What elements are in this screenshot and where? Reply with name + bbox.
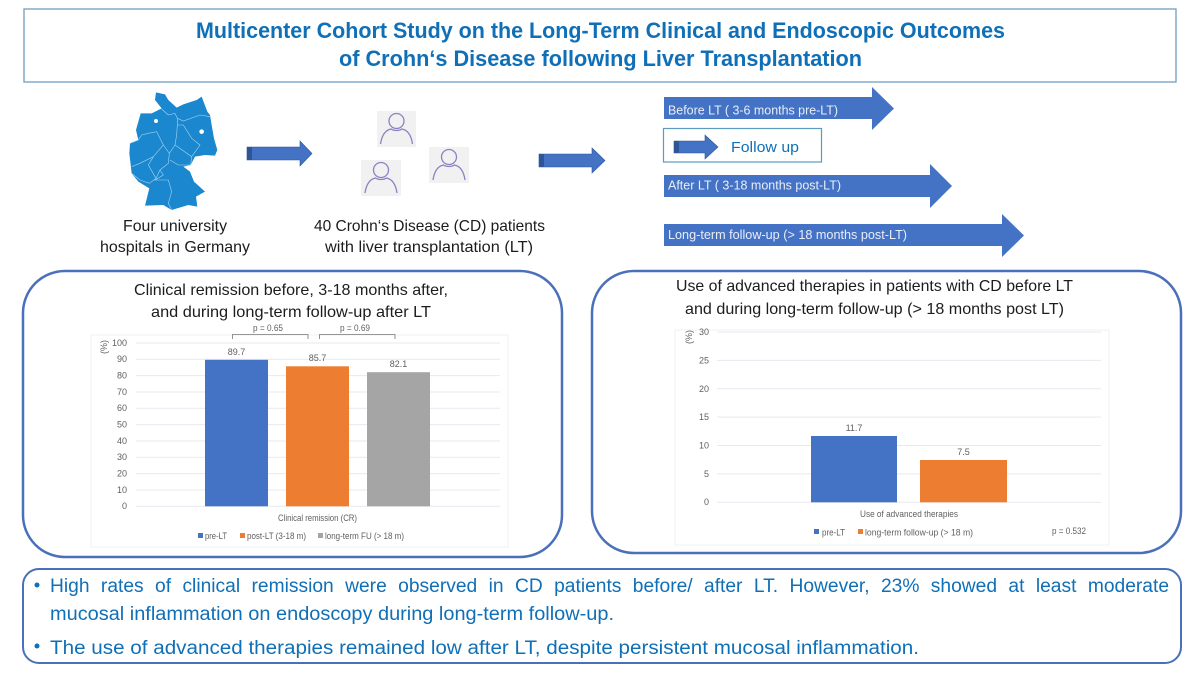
bar chart: clinical remission: 80 (117, 370, 127, 380)
bar: pre-LT (811, 436, 897, 502)
bar chart: clinical remission: (%) (99, 340, 109, 354)
conclusion 2: The use of advanced therapies remained low after LT, despite persistent mucosal inflammation. (50, 638, 919, 659)
bar chart: clinical remission: 10 (117, 485, 127, 495)
bar: post-LT (286, 366, 349, 506)
bar chart: clinical remission: 90 (117, 354, 127, 364)
p-value brackets: p = 0.65 (253, 323, 283, 333)
p-value: p = 0.532 (1052, 526, 1086, 536)
text: four university hospitals: hospitals in Germany (100, 239, 250, 256)
bar chart: clinical remission: 82.1 (390, 359, 407, 369)
p-value brackets: p = 0.69 (340, 323, 370, 333)
bar: pre-LT (205, 360, 268, 506)
chart legend: post-LT (3-18 m) (247, 531, 306, 541)
icon: patient 3 (429, 147, 469, 183)
title box (24, 9, 1176, 82)
arrow: map to patients (247, 141, 312, 166)
bar chart: clinical remission: 0 (122, 501, 127, 511)
text: patients description (314, 218, 545, 256)
bar chart: advanced therapies: 7.5 (957, 447, 970, 457)
arrow: after LT: After LT ( 3-18 months post-LT) (668, 178, 841, 192)
bar chart: advanced therapies: 25 (699, 356, 709, 366)
panel: clinical remission (23, 271, 562, 557)
legend: follow up: Follow up (731, 139, 799, 156)
title box: Multicenter Cohort Study on the Long-Term Clinical and Endoscopic Outcomes (196, 18, 1005, 43)
bar chart: clinical remission: 100 (112, 338, 127, 348)
bar chart: clinical remission: 70 (117, 387, 127, 397)
conclusion 1 (34, 576, 1169, 625)
heading: advanced therapies (676, 278, 1073, 318)
bar chart: advanced therapies: 11.7 (846, 423, 862, 433)
bar chart: clinical remission: 30 (117, 452, 127, 462)
chart legend: pre-LT (205, 531, 227, 541)
bar chart: advanced therapies: 15 (699, 412, 709, 422)
bar chart: clinical remission (91, 323, 508, 547)
conclusion 1: mucosal inflammation on endoscopy during long-term follow-up. (50, 604, 614, 625)
arrow: long-term follow-up: Long-term follow-up (> 18 months post-LT) (668, 228, 907, 242)
bar: long-term follow-up (920, 460, 1007, 502)
bar chart: advanced therapies: 10 (699, 440, 709, 450)
bar chart: clinical remission: 50 (117, 420, 127, 430)
panel: conclusions (23, 569, 1181, 663)
conclusion 1: High rates of clinical remission were observed in CD patients before/ after LT. However, 23% showed at least moderate (50, 576, 1169, 597)
chart legend: long-term follow-up (> 18 m) (865, 528, 973, 538)
text: four university hospitals: Four university (123, 218, 227, 235)
bar chart: advanced therapies: (%) (684, 330, 694, 344)
arrow: patients to follow-up (539, 148, 605, 173)
title box: of Crohn‘s Disease following Liver Transplantation (339, 46, 862, 71)
heading: clinical remission (134, 282, 448, 321)
p-value brackets (232, 323, 395, 339)
chart legend (198, 531, 404, 541)
icon: patients (361, 111, 469, 196)
icon: patient 2 (361, 160, 401, 196)
icon: map of Germany (129, 92, 217, 210)
arrow: long-term follow-up (664, 214, 1024, 257)
bar chart: clinical remission: 20 (117, 468, 127, 478)
heading: clinical remission: Clinical remission before, 3-18 months after, (134, 282, 448, 299)
bar chart: advanced therapies: Use of advanced therapies (860, 509, 958, 519)
bar: long-term FU (367, 372, 430, 506)
chart legend (814, 528, 973, 538)
bar chart: advanced therapies: 0 (704, 497, 709, 507)
heading: clinical remission: and during long-term follow-up after LT (151, 304, 431, 321)
bar chart: advanced therapies (675, 327, 1109, 545)
bar chart: clinical remission: Clinical remission (CR) (278, 513, 357, 523)
legend: follow up (664, 128, 822, 162)
bar chart: clinical remission: 40 (117, 436, 127, 446)
chart legend: pre-LT (822, 528, 845, 538)
bar chart: clinical remission: 60 (117, 403, 127, 413)
bar chart: advanced therapies: 20 (699, 384, 709, 394)
arrow: before LT: Before LT ( 3-6 months pre-LT) (668, 104, 838, 118)
bar chart: clinical remission: 89.7 (228, 347, 245, 357)
text: patients description: 40 Crohn‘s Disease (CD) patients (314, 218, 545, 235)
icon: patient 1 (377, 111, 416, 147)
heading: advanced therapies: Use of advanced therapies in patients with CD before LT (676, 278, 1073, 295)
bar chart: advanced therapies: 30 (699, 327, 709, 337)
heading: advanced therapies: and during long-term follow-up (> 18 months post LT) (685, 301, 1064, 318)
text: patients description: with liver transplantation (LT) (324, 239, 533, 256)
text: four university hospitals (100, 218, 250, 256)
arrow: after LT (664, 164, 952, 208)
bar chart: advanced therapies: 5 (704, 469, 709, 479)
bar chart: clinical remission: 85.7 (309, 353, 326, 363)
panel: advanced therapies (592, 271, 1181, 553)
arrow: before LT (664, 87, 894, 130)
chart legend: long-term FU (> 18 m) (325, 531, 404, 541)
